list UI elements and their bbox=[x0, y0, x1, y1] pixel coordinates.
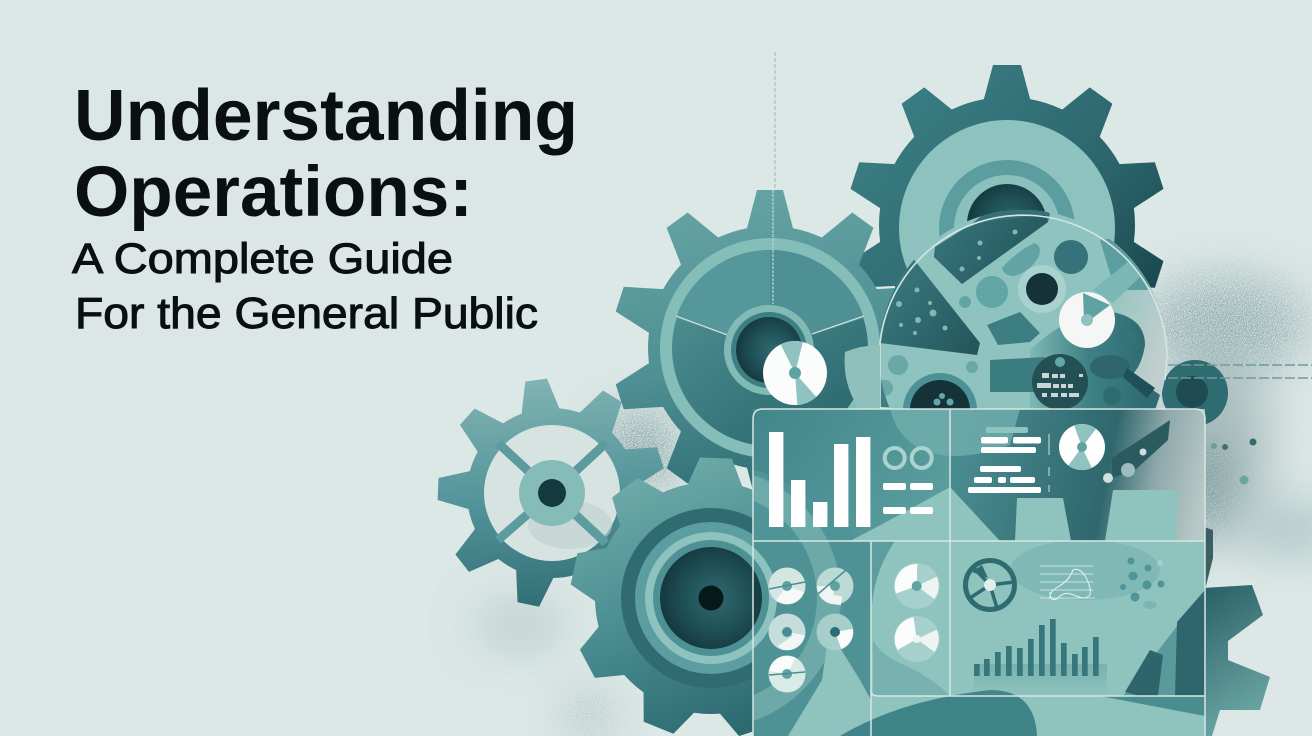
gear: large top bbox=[850, 65, 1164, 288]
light tabs bbox=[1015, 498, 1071, 541]
gear: lower right bbox=[1130, 517, 1270, 736]
subtitle line 1: A Complete Guide bbox=[72, 235, 453, 283]
small gauge pies bbox=[768, 568, 854, 692]
upper right pie bbox=[1059, 424, 1105, 470]
teal sliver in middle cell bbox=[871, 541, 895, 605]
gear: small left bbox=[438, 378, 664, 607]
title line 2: Operations: bbox=[74, 153, 473, 232]
gear tooth seen through glass bbox=[1100, 235, 1150, 290]
small right disc with dashed data lines bbox=[1162, 360, 1312, 484]
wedge dots bbox=[896, 230, 1018, 335]
title line 1: Understanding bbox=[74, 76, 578, 156]
gear window bbox=[484, 425, 620, 561]
gear eye seen through the panel bbox=[754, 548, 777, 648]
molecule cluster bbox=[1120, 558, 1164, 609]
lower right wedge bbox=[1124, 626, 1177, 696]
bottom dark blob bbox=[840, 690, 1037, 736]
middle column pies bbox=[894, 563, 940, 662]
right teal lobe bbox=[1030, 312, 1160, 408]
dark bar chart bbox=[974, 619, 1107, 696]
small dashed vertical guide line bbox=[774, 52, 776, 190]
small round readout bbox=[1032, 354, 1088, 410]
panel frame lines bbox=[753, 409, 1205, 736]
gear hole bbox=[967, 184, 1047, 264]
glass fill bbox=[880, 210, 1166, 408]
gear eye bbox=[660, 547, 762, 649]
title block bbox=[72, 76, 578, 338]
small divider ticks bbox=[1048, 434, 1050, 492]
dark wedge left bbox=[880, 257, 980, 355]
white pie chart on middle gear bbox=[763, 341, 827, 405]
gear: large bottom bbox=[570, 458, 752, 736]
dark wedge bbox=[934, 215, 1048, 284]
pale dots near pie bbox=[1103, 448, 1146, 483]
glass dial bbox=[879, 210, 1168, 408]
white bar chart bbox=[769, 432, 870, 527]
airbrushed shadow texture bbox=[475, 275, 1312, 736]
spoke lines bbox=[676, 190, 864, 336]
white pills bbox=[883, 483, 933, 514]
glass shapes bbox=[1054, 240, 1088, 274]
line chart sketch bbox=[1040, 566, 1095, 600]
gear: middle bbox=[616, 190, 895, 488]
gear hub bbox=[519, 460, 585, 526]
gear spokes bbox=[498, 443, 606, 543]
hub bbox=[724, 305, 814, 395]
wheel icon bbox=[966, 560, 1014, 610]
text placeholder lines bbox=[968, 427, 1041, 493]
dashboard panel bbox=[752, 408, 1206, 736]
white gauge bbox=[1059, 292, 1115, 348]
light lower panel bbox=[871, 541, 1205, 736]
subtitle line 2: For the General Public bbox=[75, 289, 538, 338]
panel backgrounds bbox=[753, 409, 1205, 736]
left bridge segment behind dial bbox=[845, 345, 880, 410]
ring icons bbox=[885, 448, 932, 468]
dark lens hub bbox=[903, 373, 977, 447]
glass outline bbox=[880, 215, 1167, 420]
dark crescent bbox=[1112, 420, 1170, 478]
